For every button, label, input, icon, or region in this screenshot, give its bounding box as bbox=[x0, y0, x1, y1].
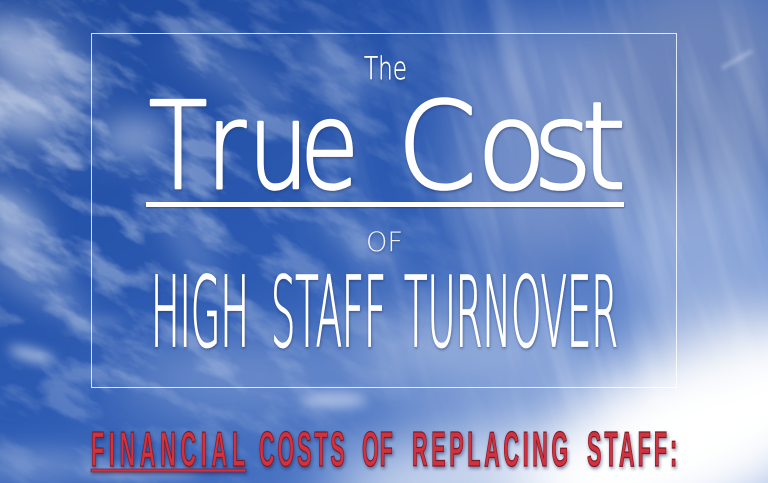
title: High Staff Turnover: HIGH bbox=[151, 256, 249, 369]
section heading: financial costs of replacing staff: FINANCIAL bbox=[91, 423, 245, 478]
title: High Staff Turnover bbox=[151, 256, 618, 369]
section heading: financial costs of replacing staff: STAFF: bbox=[587, 423, 677, 478]
title: True Cost: Cost bbox=[397, 76, 626, 217]
title underline bbox=[146, 202, 624, 207]
title: High Staff Turnover: STAFF bbox=[271, 256, 386, 369]
section heading: financial costs of replacing staff: REPLACING bbox=[412, 423, 568, 478]
section heading: financial costs of replacing staff: COSTS bbox=[259, 423, 345, 478]
section heading: financial costs of replacing staff: OF bbox=[362, 423, 393, 478]
title frame bbox=[92, 34, 676, 388]
title: True Cost: True bbox=[149, 76, 359, 217]
title: True Cost bbox=[149, 76, 626, 217]
title: OF: OF bbox=[366, 227, 403, 258]
section heading: financial costs of replacing staff bbox=[91, 423, 677, 478]
title: The: The bbox=[364, 51, 407, 87]
